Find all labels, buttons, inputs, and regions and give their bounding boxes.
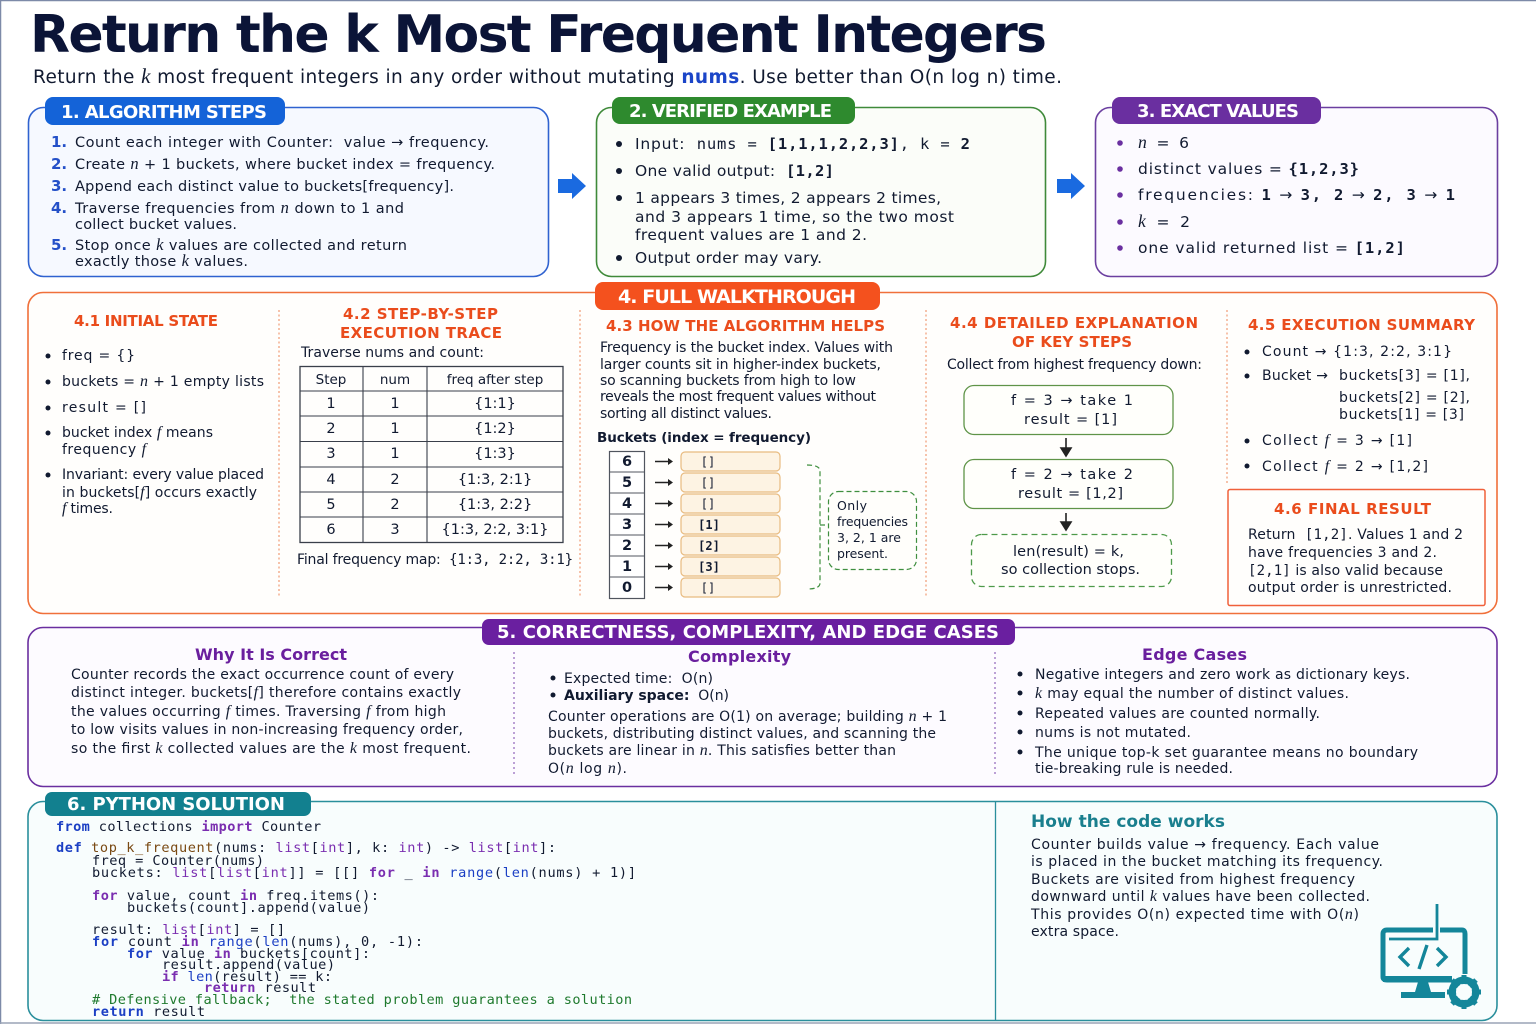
section 4.3 how the algorithm helps: larger counts sit in higher-index buckets, [600, 357, 881, 373]
column: edge cases: tie-breaking rule is needed. [1035, 761, 1233, 777]
table: execution trace: 2 [326, 421, 336, 437]
column: complexity: Auxiliary space: O(n) [564, 688, 729, 704]
column: complexity: Expected time: O(n) [564, 671, 713, 687]
step box: f = 3 [964, 386, 1173, 434]
panel: algorithm steps [28, 97, 548, 276]
column: edge cases: Repeated values are counted normally. [1035, 706, 1320, 722]
numbered steps [51, 133, 495, 270]
table: execution trace: {1:1} [474, 396, 516, 412]
arrow: example to values [1057, 173, 1085, 199]
code block: for value, count in freq.items(): [92, 888, 379, 904]
code block: buckets(count].append(value) [127, 900, 370, 916]
values bullets: frequencies: 1 → 3, 2 → 2, 3 → 1 [1138, 186, 1455, 204]
table: execution trace: {1:3, 2:2, 3:1} [442, 522, 548, 538]
values bullets: distinct values = {1,2,3} [1138, 160, 1359, 178]
step box: collection stops: so collection stops. [1001, 562, 1140, 578]
numbered steps: Append each distinct value to buckets[frequency]. [75, 179, 454, 195]
bucket array: [] [701, 455, 715, 469]
column: edge cases: k may equal the number of distinct values. [1035, 685, 1349, 702]
step box: f = 2 [964, 460, 1173, 508]
section 4.3 how the algorithm helps: Frequency is the bucket index. Values with [600, 340, 893, 356]
heading: python solution: 6. PYTHON SOLUTION [67, 794, 285, 815]
section 4.2 step-by-step trace [297, 305, 573, 568]
text: how the code works: How the code works [1031, 812, 1225, 832]
table: execution trace: num [380, 372, 410, 388]
heading: full walkthrough [595, 282, 880, 310]
section 4.3 how the algorithm helps: Buckets (index = frequency) [597, 430, 811, 446]
example bullets: Output order may vary. [635, 249, 822, 267]
example bullets: Input: nums = [1,1,1,2,2,3], k = 2 [635, 135, 970, 153]
section 4.6 final result [1228, 490, 1485, 606]
code block: # Defensive fallback; the stated problem guarantees a solution [92, 992, 632, 1008]
example bullets: One valid output: [1,2] [635, 162, 834, 180]
code block: return result [204, 980, 316, 996]
section 4.5 execution summary: Count → {1:3, 2:2, 3:1} [1262, 344, 1452, 360]
code block [56, 819, 636, 1020]
subtitle: Return the k most frequent integers in any order without mutating nums. Use better than O(n log n) time. [33, 64, 1062, 88]
numbered steps: Count each integer with Counter: value → frequency. [75, 135, 489, 151]
values bullets: k = 2 [1138, 211, 1190, 231]
column: edge cases [1018, 645, 1418, 777]
section 4.2 step-by-step trace: EXECUTION TRACE [340, 324, 502, 342]
section 4.1 initial state: Invariant: every value placed [62, 467, 264, 483]
numbered steps: 4. [51, 199, 67, 217]
step box: collection stops: len(result) = k, [1013, 544, 1124, 560]
table: execution trace: {1:3} [474, 446, 516, 462]
bucket array: 1 [622, 559, 632, 575]
heading: verified example [612, 97, 855, 124]
section 4.5 execution summary: Collect f = 2 → [1,2] [1262, 458, 1428, 475]
bucket array: [3] [698, 560, 720, 574]
callout: only frequencies present: frequencies [837, 514, 908, 529]
code block: from collections import Counter [56, 819, 321, 835]
title: Return the k Most Frequent Integers [30, 5, 1047, 65]
step box: f = 3: f = 3 → take 1 [1011, 393, 1133, 409]
example bullets: 1 appears 3 times, 2 appears 2 times, [635, 189, 941, 207]
table: execution trace: 2 [390, 472, 400, 488]
table: execution trace: {1:2} [474, 421, 516, 437]
table: execution trace: 3 [326, 446, 336, 462]
column: edge cases: The unique top-k set guarantee means no boundary [1034, 745, 1418, 761]
bucket array [609, 452, 780, 598]
column: edge cases: Edge Cases [1142, 645, 1247, 664]
table: execution trace: {1:3, 2:1} [458, 472, 532, 488]
table: execution trace [300, 366, 563, 543]
bucket array: 5 [622, 475, 632, 491]
section 4.6 final result: have frequencies 3 and 2. [1248, 545, 1437, 561]
column: complexity [548, 647, 947, 777]
numbered steps: 5. [51, 236, 67, 254]
values bullets: one valid returned list = [1,2] [1138, 239, 1405, 257]
numbered steps: Create n + 1 buckets, where bucket index = frequency. [75, 154, 495, 173]
section 4.5 execution summary: buckets[1] = [3] [1339, 407, 1464, 423]
arrow: steps to example [558, 173, 586, 199]
heading: correctness section: 5. CORRECTNESS, COMPLEXITY, AND EDGE CASES [497, 622, 999, 643]
table: execution trace: 4 [326, 472, 336, 488]
section 4.1 initial state: bucket index f means [62, 424, 213, 441]
callout: only frequencies present: 3, 2, 1 are [837, 530, 901, 545]
step box: f = 3: result = [1] [1024, 412, 1117, 428]
section 4.1 initial state: f times. [62, 500, 113, 517]
step box: f = 2: f = 2 → take 2 [1011, 467, 1133, 483]
heading: algorithm steps [45, 97, 285, 125]
section 4.5 execution summary: buckets[3] = [1], [1339, 368, 1470, 384]
column: why it is correct: the values occurring f times. Traversing f from high [71, 703, 446, 720]
section 4.4 detailed explanation: 4.4 DETAILED EXPLANATION [950, 314, 1198, 332]
code block: result: list[int] = [] [92, 922, 285, 938]
bucket array: [1] [698, 518, 720, 532]
values bullets: n = 6 [1138, 132, 1189, 152]
section 4.6 final result: 4.6 FINAL RESULT [1274, 500, 1432, 518]
example bullets: frequent values are 1 and 2. [635, 226, 867, 244]
section 4.4 detailed explanation: Collect from highest frequency down: [947, 357, 1202, 373]
column: why it is correct: to low visits values in non-increasing frequency order, [71, 722, 463, 738]
section 4.3 how the algorithm helps: reveals the most frequent values without [600, 389, 876, 405]
table: execution trace: 6 [326, 522, 336, 538]
step box: collection stops [972, 534, 1172, 586]
arrow: down [1061, 438, 1071, 456]
bucket array: 4 [622, 496, 632, 512]
bucket array: 2 [622, 538, 632, 554]
section 4.6 final result: Return [1,2]. Values 1 and 2 [1248, 527, 1463, 543]
code block: freq = Counter(nums) [92, 853, 264, 869]
callout: only frequencies present [807, 465, 916, 589]
column: why it is correct: distinct integer. buckets[f] therefore contains exactly [71, 684, 461, 701]
code block: for count in range(len(nums), 0, -1): [92, 934, 423, 950]
bucket array: 6 [622, 454, 632, 470]
table: execution trace: 5 [326, 497, 336, 513]
section 4.1 initial state: freq = {} [62, 348, 135, 364]
bucket array: 0 [622, 580, 632, 596]
column: why it is correct [71, 645, 471, 757]
section 4.3 how the algorithm helps [597, 317, 916, 598]
table: execution trace: 1 [326, 396, 336, 412]
column: why it is correct: so the first k collected values are the k most frequent. [71, 740, 471, 757]
arrow: down [1061, 513, 1071, 530]
section 4.3 how the algorithm helps: so scanning buckets from high to low [600, 373, 856, 389]
table: execution trace: {1:3, 2:2} [458, 497, 532, 513]
section 4.1 initial state: frequency f [62, 441, 149, 458]
code block: if len(result) == k: [162, 969, 332, 985]
numbered steps: 3. [51, 177, 67, 195]
section 4.5 execution summary: Collect f = 3 → [1] [1262, 432, 1412, 449]
column: why it is correct: Why It Is Correct [195, 645, 347, 664]
section 4.5 execution summary: 4.5 EXECUTION SUMMARY [1248, 316, 1476, 334]
bucket array: [] [701, 476, 715, 490]
column: complexity: O(n log n). [548, 760, 627, 777]
column: complexity: buckets, distributing distinct values, and scanning the [548, 726, 936, 742]
column: complexity: Complexity [688, 647, 792, 666]
section 4.5 execution summary [1244, 316, 1476, 475]
text: how the code works: Buckets are visited from highest frequency [1031, 872, 1355, 888]
heading: exact values [1112, 97, 1321, 124]
step box: f = 2: result = [1,2] [1018, 486, 1123, 502]
panel: full walkthrough [28, 282, 1497, 614]
panel: verified example [596, 97, 1046, 276]
section 4.1 initial state: result = [] [62, 400, 146, 416]
numbered steps: Traverse frequencies from n down to 1 and [74, 198, 404, 217]
values bullets [1117, 132, 1455, 257]
bucket array: [] [701, 497, 715, 511]
table: execution trace: Step [316, 372, 346, 388]
text: how the code works: Counter builds value → frequency. Each value [1031, 837, 1379, 853]
section 4.3 how the algorithm helps: 4.3 HOW THE ALGORITHM HELPS [606, 317, 885, 335]
bucket array: 3 [622, 517, 632, 533]
numbered steps: collect bucket values. [75, 217, 237, 233]
heading: exact values: 3. EXACT VALUES [1137, 101, 1299, 122]
panel: correctness, complexity, edge cases [28, 619, 1497, 786]
numbered steps: Stop once k values are collected and return [75, 235, 407, 254]
section 4.4 detailed explanation: OF KEY STEPS [1012, 333, 1132, 351]
numbered steps: exactly those k values. [75, 251, 248, 270]
code block: result.append(value) [162, 957, 335, 973]
heading: full walkthrough: 4. FULL WALKTHROUGH [618, 286, 856, 308]
column: complexity: Counter operations are O(1) on average; building n + 1 [548, 708, 947, 725]
heading: verified example: 2. VERIFIED EXAMPLE [629, 101, 832, 122]
example bullets: and 3 appears 1 time, so the two most [635, 208, 954, 226]
code block: def top_k_frequent(nums: list[int], k: int) -> list[int]: [56, 840, 556, 856]
bucket array: [] [701, 581, 715, 595]
text: how the code works: extra space. [1031, 924, 1119, 940]
section 4.6 final result: output order is unrestricted. [1248, 580, 1452, 596]
code block: for value in buckets[count]: [127, 946, 370, 962]
section 4.1 initial state: 4.1 INITIAL STATE [74, 312, 218, 330]
section 4.2 step-by-step trace: Final frequency map: {1:3, 2:2, 3:1} [297, 552, 573, 568]
section 4.1 initial state: in buckets[f] occurs exactly [62, 484, 257, 501]
section 4.5 execution summary: buckets[2] = [2], [1339, 390, 1470, 406]
panel: exact values [1096, 97, 1498, 276]
section 4.1 initial state [46, 312, 264, 517]
callout: only frequencies present: Only [837, 498, 868, 513]
section 4.4 detailed explanation [947, 314, 1202, 586]
column: edge cases: Negative integers and zero work as dictionary keys. [1035, 667, 1410, 683]
section 4.2 step-by-step trace: 4.2 STEP-BY-STEP [343, 305, 498, 323]
section 4.3 how the algorithm helps: sorting all distinct values. [600, 406, 772, 422]
column: edge cases: nums is not mutated. [1035, 725, 1191, 741]
table: execution trace: 2 [390, 497, 400, 513]
numbered steps: 2. [51, 155, 67, 173]
table: execution trace: 1 [390, 396, 400, 412]
section 4.5 execution summary: Bucket → [1262, 368, 1328, 384]
bucket array: [2] [698, 539, 720, 553]
section 4.2 step-by-step trace: Traverse nums and count: [300, 345, 484, 361]
panel: python solution [28, 792, 1497, 1021]
table: execution trace: 1 [390, 446, 400, 462]
icon: computer with code and gear [1383, 904, 1481, 1009]
section 4.6 final result: [2,1] is also valid because [1248, 563, 1443, 579]
callout: only frequencies present: present. [837, 546, 888, 561]
text: how the code works: This provides O(n) expected time with O(n) [1030, 906, 1359, 923]
table: execution trace: 1 [390, 421, 400, 437]
text: how the code works [1030, 812, 1383, 940]
code block: buckets: list[list[int]] = [[] for _ in range(len(nums) + 1)] [92, 865, 636, 881]
section 4.1 initial state: buckets = n + 1 empty lists [62, 373, 264, 390]
example bullets [616, 135, 970, 267]
column: why it is correct: Counter records the exact occurrence count of every [71, 667, 454, 683]
text: how the code works: is placed in the bucket matching its frequency. [1031, 854, 1383, 870]
heading: algorithm steps: 1. ALGORITHM STEPS [61, 102, 267, 123]
text: how the code works: downward until k values have been collected. [1031, 888, 1370, 905]
table: execution trace: freq after step [447, 372, 543, 388]
table: execution trace: 3 [390, 522, 400, 538]
column: complexity: buckets are linear in n. This satisfies better than [548, 742, 896, 759]
numbered steps: 1. [51, 133, 67, 151]
code block: return result [92, 1004, 205, 1020]
